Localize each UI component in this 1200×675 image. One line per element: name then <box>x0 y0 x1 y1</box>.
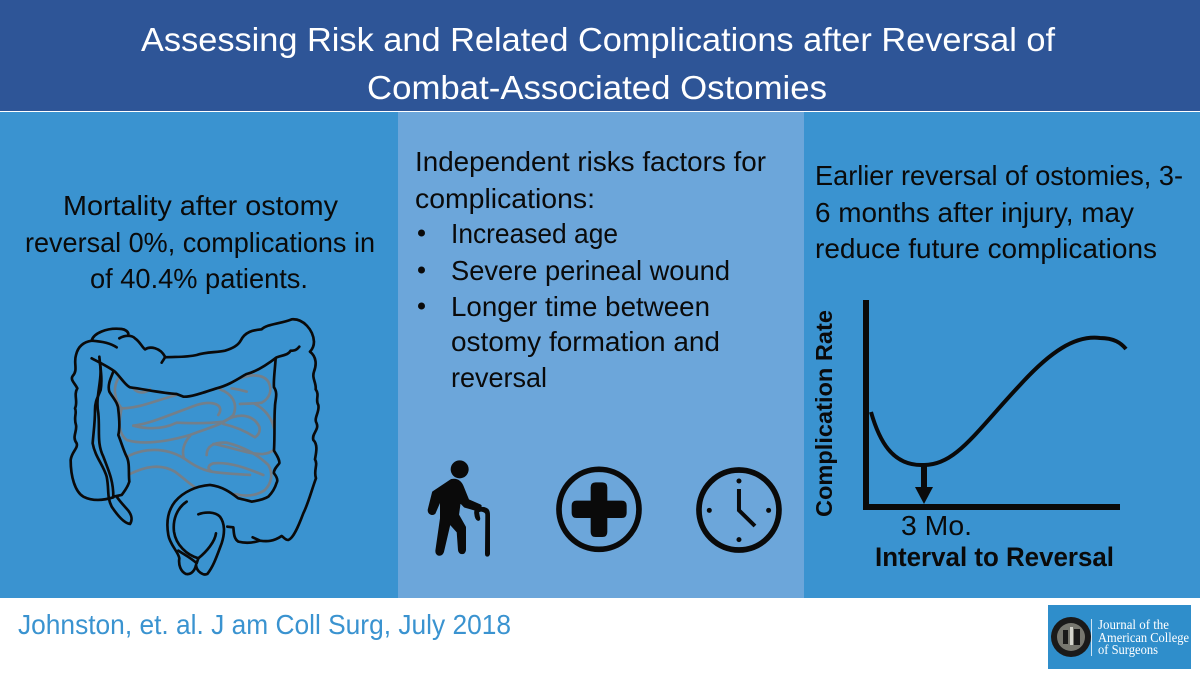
text: risk factors heading: Independent risks factors for <box>415 146 766 177</box>
logo text: American College <box>1098 631 1189 646</box>
label: 3 months: 3 Mo. <box>901 510 972 541</box>
icon: elderly person with cane <box>429 460 489 556</box>
text: mortality and complications: reversal 0%, complications in <box>25 227 375 258</box>
chart curve <box>871 338 1126 465</box>
icon: clock <box>699 470 779 550</box>
text: risk factors heading: complications: <box>415 183 595 214</box>
arrow: minimum at 3 months <box>915 465 933 504</box>
list: risk factors: Severe perineal wound <box>451 255 730 286</box>
icon: medical cross <box>559 469 639 549</box>
x axis label: Interval to Reversal <box>875 542 1114 572</box>
text: earlier reversal conclusion: Earlier reversal of ostomies, 3- <box>815 160 1183 191</box>
chart axes <box>866 300 1120 507</box>
list: risk factors <box>418 218 730 393</box>
text: mortality and complications <box>25 190 375 294</box>
text: mortality and complications: of 40.4% patients. <box>90 263 308 294</box>
header banner <box>0 0 1200 111</box>
text: mortality and complications: Mortality after ostomy <box>63 190 338 221</box>
logo seal <box>1051 617 1091 657</box>
logo text <box>1098 618 1189 658</box>
y axis label: Complication Rate <box>811 310 837 517</box>
list: risk factors: ostomy formation and <box>451 326 720 357</box>
panel: earlier reversal <box>804 112 1200 598</box>
logo text: of Surgeons <box>1098 643 1158 658</box>
title: Assessing Risk and Related Complications after Reversal of <box>141 22 1056 59</box>
title: Combat-Associated Ostomies <box>367 70 827 107</box>
list: risk factors: Increased age <box>451 218 618 249</box>
list: risk factors: Longer time between <box>451 291 710 322</box>
icon: intestines <box>71 319 319 574</box>
panel: risk factors <box>398 112 804 598</box>
chart: complication rate versus interval to reversal <box>811 300 1126 572</box>
text: earlier reversal conclusion: reduce future complications <box>815 233 1157 264</box>
panel: mortality <box>0 112 398 598</box>
logo text: Journal of the <box>1098 618 1169 633</box>
list: risk factors: reversal <box>451 362 547 393</box>
logo: Journal of the American College of Surgeons <box>1048 605 1191 669</box>
citation: Johnston, et. al. J am Coll Surg, July 2018 <box>18 609 511 640</box>
text: earlier reversal conclusion: 6 months after injury, may <box>815 197 1134 228</box>
title <box>141 22 1056 107</box>
text: earlier reversal conclusion <box>815 160 1183 264</box>
text: risk factors heading <box>415 146 766 214</box>
